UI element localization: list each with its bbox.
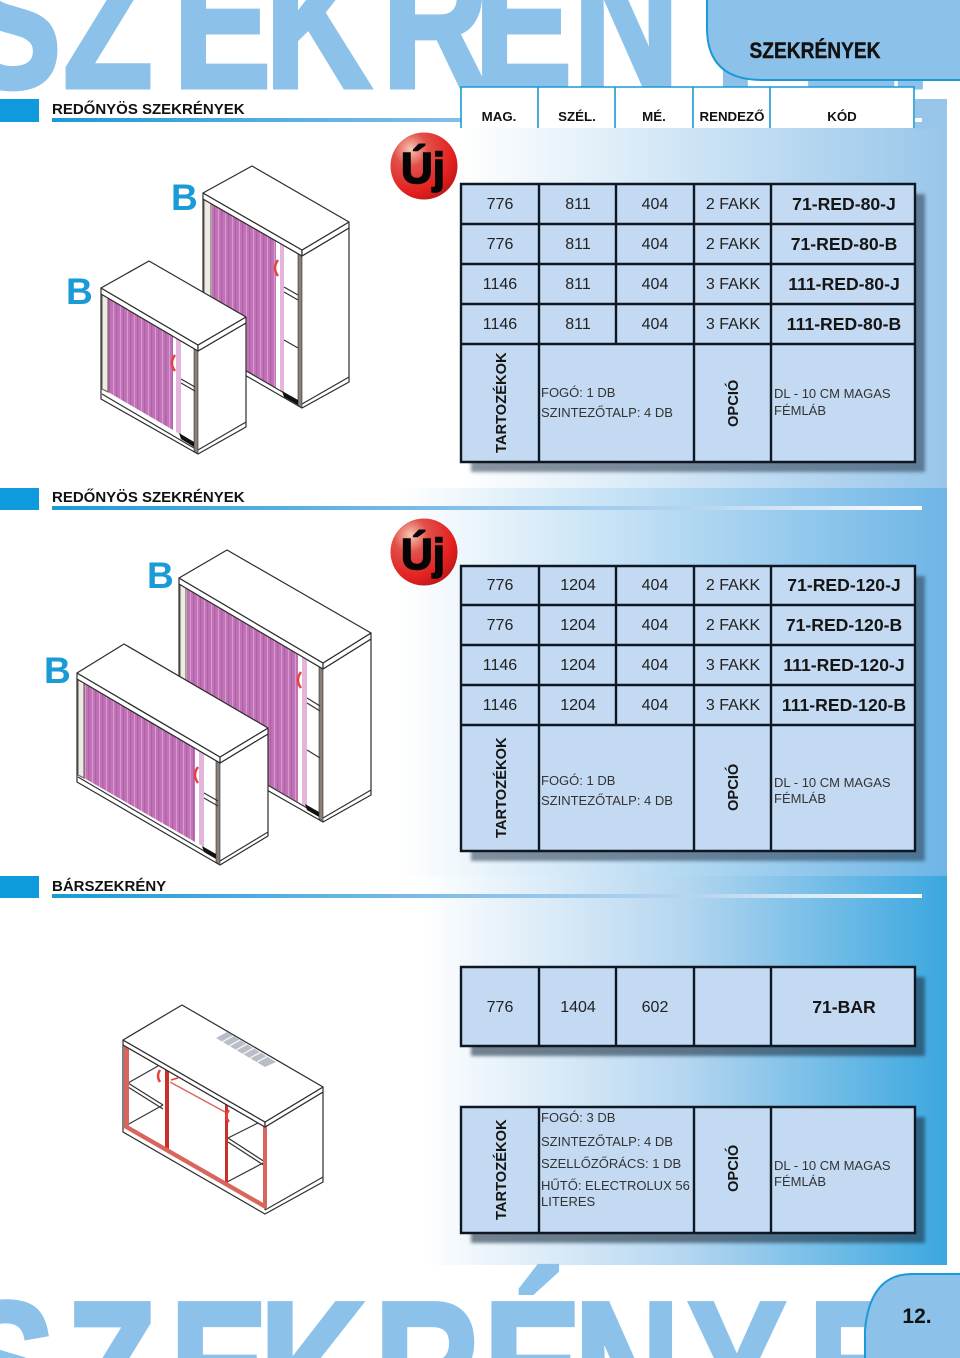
table: section 3 sizes: 1404	[560, 999, 596, 1016]
table: section 2 sizes: 1146	[483, 657, 517, 674]
table: section 1 sizes: 111-RED-80-B	[787, 314, 901, 334]
table: section 1 sizes: 811	[565, 276, 591, 293]
table: section 1 sizes: 71-RED-80-B	[791, 234, 897, 254]
table: section 1 sizes: 404	[642, 276, 668, 293]
table header: RENDEZŐ	[699, 109, 765, 124]
table: section 2 sizes: FÉMLÁB	[774, 791, 826, 806]
table: section 1 sizes: 811	[565, 316, 591, 333]
badge: new, section 2: Új	[401, 529, 445, 579]
table: section 2 sizes: 776	[487, 617, 513, 634]
table: section 2 sizes: 1204	[560, 577, 596, 594]
label B wide low cabinet: B	[44, 650, 71, 691]
table: section 2 sizes: TARTOZÉKOK	[493, 737, 510, 838]
table: section 1 sizes: 3 FAKK	[706, 276, 760, 293]
table: section 2 sizes: 404	[642, 617, 668, 634]
page number tab	[865, 1274, 960, 1358]
table: section 1 sizes: 811	[565, 236, 591, 253]
table: section 1 sizes: 2 FAKK	[706, 196, 760, 213]
table: section 2 sizes: 3 FAKK	[706, 697, 760, 714]
table: section 1 sizes	[461, 184, 925, 472]
table header: MÉ.	[642, 109, 666, 124]
table: section 3 sizes	[461, 967, 925, 1056]
table: section 1 sizes: 404	[642, 316, 668, 333]
table: section 2 sizes: 2 FAKK	[706, 617, 760, 634]
panel: section 3 background	[420, 876, 947, 1265]
table: section 1 sizes: 1146	[483, 276, 517, 293]
table: section 2 sizes: 111-RED-120-B	[782, 695, 906, 715]
label B wide tall cabinet: B	[147, 555, 174, 596]
corner tab with chapter title: SZEKRÉNYEK	[750, 38, 881, 63]
table: section 2 sizes: 2 FAKK	[706, 577, 760, 594]
panel: section 1 background	[460, 99, 947, 488]
table: section 1 sizes: SZINTEZŐTALP: 4 DB	[541, 405, 673, 420]
table: section 3 sizes: 776	[487, 999, 513, 1016]
table: section 2 sizes: DL - 10 CM MAGAS	[774, 775, 891, 790]
illustration: wide tall roller shutter cabinet	[179, 550, 371, 822]
table: section 2 sizes: 1204	[560, 657, 596, 674]
table: section 3 accessories: FOGÓ: 3 DB	[541, 1110, 615, 1125]
page number tab: 12.	[902, 1305, 932, 1328]
table: section 3 accessories: HŰTŐ: ELECTROLUX 56	[541, 1178, 690, 1193]
table: section 2 sizes	[461, 566, 925, 861]
table: section 1 sizes: 111-RED-80-J	[788, 274, 900, 294]
table: section 2 sizes: OPCIÓ	[724, 764, 742, 811]
table: section 1 sizes: 1146	[483, 316, 517, 333]
badge: new, section 1: Új	[401, 143, 445, 193]
table: section 1 sizes: 71-RED-80-J	[792, 194, 896, 214]
badge: new, section 2	[390, 518, 458, 586]
badge: new, section 1	[390, 132, 458, 200]
heading: section 1: REDŐNYÖS SZEKRÉNYEK	[52, 100, 245, 118]
table: section 3 accessories: SZINTEZŐTALP: 4 DB	[541, 1134, 673, 1149]
heading: section 3	[0, 876, 922, 898]
illustration: low roller shutter cabinet	[101, 261, 246, 454]
table: section 2 sizes: 404	[642, 577, 668, 594]
table: section 1 sizes: DL - 10 CM MAGAS	[774, 386, 891, 401]
table: section 3 accessories: TARTOZÉKOK	[493, 1119, 510, 1220]
illustration: wide low roller shutter cabinet	[77, 644, 268, 865]
table header: KÓD	[827, 109, 857, 124]
table: section 2 sizes: 71-RED-120-B	[786, 615, 902, 635]
table: section 1 sizes: FÉMLÁB	[774, 403, 826, 418]
table header	[461, 87, 914, 128]
heading: section 1	[0, 99, 922, 122]
illustration: bar cabinet	[123, 1005, 323, 1214]
table: section 3 accessories: FÉMLÁB	[774, 1174, 826, 1189]
heading: section 3: BÁRSZEKRÉNY	[52, 878, 166, 895]
table header: MAG.	[482, 109, 516, 124]
table: section 1 sizes: 404	[642, 196, 668, 213]
table: section 2 sizes: 3 FAKK	[706, 657, 760, 674]
table: section 1 sizes: 776	[487, 236, 513, 253]
table: section 1 sizes: 3 FAKK	[706, 316, 760, 333]
table: section 1 sizes: 776	[487, 196, 513, 213]
illustration: tall roller shutter cabinet	[203, 166, 349, 408]
table: section 3 accessories: DL - 10 CM MAGAS	[774, 1158, 891, 1173]
table: section 1 sizes: 811	[565, 196, 591, 213]
label B low cabinet: B	[66, 271, 93, 312]
table: section 2 sizes: 404	[642, 697, 668, 714]
table: section 1 sizes: 404	[642, 236, 668, 253]
label B tall cabinet: B	[171, 177, 198, 218]
heading: section 2: REDŐNYÖS SZEKRÉNYEK	[52, 488, 245, 506]
table: section 1 sizes: OPCIÓ	[724, 380, 742, 427]
heading: section 2	[0, 488, 922, 510]
table: section 2 sizes: 776	[487, 577, 513, 594]
table: section 3 accessories: OPCIÓ	[724, 1145, 742, 1192]
table: section 2 sizes: 1204	[560, 697, 596, 714]
table: section 1 sizes: FOGÓ: 1 DB	[541, 385, 615, 400]
table: section 2 sizes: 404	[642, 657, 668, 674]
table: section 2 sizes: 1204	[560, 617, 596, 634]
table: section 3 accessories: LITERES	[541, 1194, 596, 1209]
table: section 2 sizes: FOGÓ: 1 DB	[541, 773, 615, 788]
panel: section 2 background	[400, 488, 947, 876]
table: section 3 accessories: SZELLŐZŐRÁCS: 1 DB	[541, 1156, 681, 1171]
table: section 1 sizes: 2 FAKK	[706, 236, 760, 253]
table: section 3 sizes: 602	[642, 999, 668, 1016]
corner tab with chapter title	[707, 0, 960, 80]
table: section 2 sizes: 1146	[483, 697, 517, 714]
table: section 3 accessories	[461, 1107, 925, 1243]
table: section 1 sizes: TARTOZÉKOK	[493, 352, 510, 453]
table: section 2 sizes: 71-RED-120-J	[787, 575, 901, 595]
table header: SZÉL.	[558, 109, 596, 124]
table: section 3 sizes: 71-BAR	[812, 997, 876, 1017]
table: section 2 sizes: SZINTEZŐTALP: 4 DB	[541, 793, 673, 808]
table: section 2 sizes: 111-RED-120-J	[783, 655, 905, 675]
